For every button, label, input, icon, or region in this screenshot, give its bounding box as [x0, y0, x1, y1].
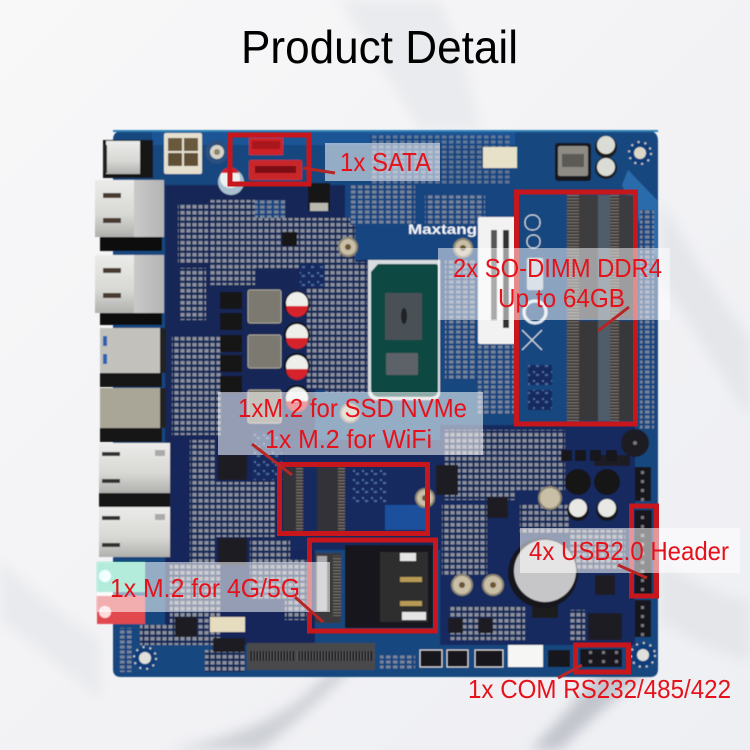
label: M.2 SSD and WiFi	[218, 392, 483, 475]
USB and side headers	[635, 467, 652, 637]
voltage regulator	[220, 290, 310, 423]
audio jacks	[97, 562, 145, 624]
power capacitor near SATA	[218, 167, 244, 195]
power jack	[103, 140, 153, 178]
highlight: M.2 SSD and WiFi box	[280, 464, 428, 534]
trace and pad clusters	[120, 135, 654, 672]
jumpers and rear headers	[420, 645, 570, 667]
M.2 SSD connector	[283, 467, 303, 533]
board dark zones	[113, 130, 658, 645]
label: M.2 4G/5G: 1x M.2 for 4G/5G	[110, 573, 300, 603]
buzzer	[621, 429, 649, 457]
audio connector	[210, 617, 245, 632]
label: USB2.0 header: 4x USB2.0 Header	[529, 536, 729, 566]
highlight: SATA box	[230, 135, 309, 184]
Maxtang logo: Maxtang	[408, 222, 477, 237]
serial sticker	[478, 217, 517, 344]
label: SATA: 1x SATA	[340, 147, 432, 177]
top right capacitors	[595, 136, 617, 179]
highlight: SO-DIMM box	[516, 192, 636, 424]
CPU	[368, 260, 440, 400]
fan connector	[483, 147, 517, 168]
highlight: M.2 4G box	[310, 540, 436, 631]
chokes and capacitors	[561, 450, 620, 521]
coin battery	[508, 538, 578, 618]
SIM slot	[345, 545, 433, 628]
COM header	[580, 649, 622, 667]
R80 inductor	[555, 143, 591, 181]
small regulator chip	[282, 232, 297, 246]
label: SO-DIMM: 2x SO-DIMM DDR4	[453, 253, 662, 283]
title: Product Detail	[241, 21, 518, 73]
mounting holes	[134, 140, 655, 669]
label: M.2 4G/5G	[97, 562, 330, 622]
label: SO-DIMM: Up to 64GB	[498, 283, 625, 313]
RJ45 ports	[99, 443, 170, 557]
label: M.2 SSD and WiFi: 1xM.2 for SSD NVMe	[238, 393, 467, 423]
motherboard	[95, 130, 658, 677]
SO-DIMM slots	[520, 195, 635, 421]
4-pin power connector	[164, 133, 202, 174]
label: USB2.0 header	[520, 528, 740, 578]
highlight: COM box	[576, 645, 628, 672]
HDMI and display ports	[95, 180, 164, 325]
PCIe slot	[247, 643, 375, 670]
USB ports	[100, 328, 166, 442]
board substrate	[113, 131, 658, 677]
label: SO-DIMM	[438, 248, 670, 331]
MOSFET near SATA	[308, 183, 330, 211]
M.2 WiFi connector	[317, 467, 345, 533]
ICs	[175, 455, 630, 652]
M.2 4G connector	[315, 553, 341, 623]
label: M.2 SSD and WiFi: 1x M.2 for WiFi	[265, 424, 432, 454]
label: COM: 1x COM RS232/485/422	[468, 674, 731, 704]
SATA connectors	[249, 138, 302, 180]
label: SATA	[303, 143, 440, 181]
highlight: USB header box	[632, 506, 656, 596]
